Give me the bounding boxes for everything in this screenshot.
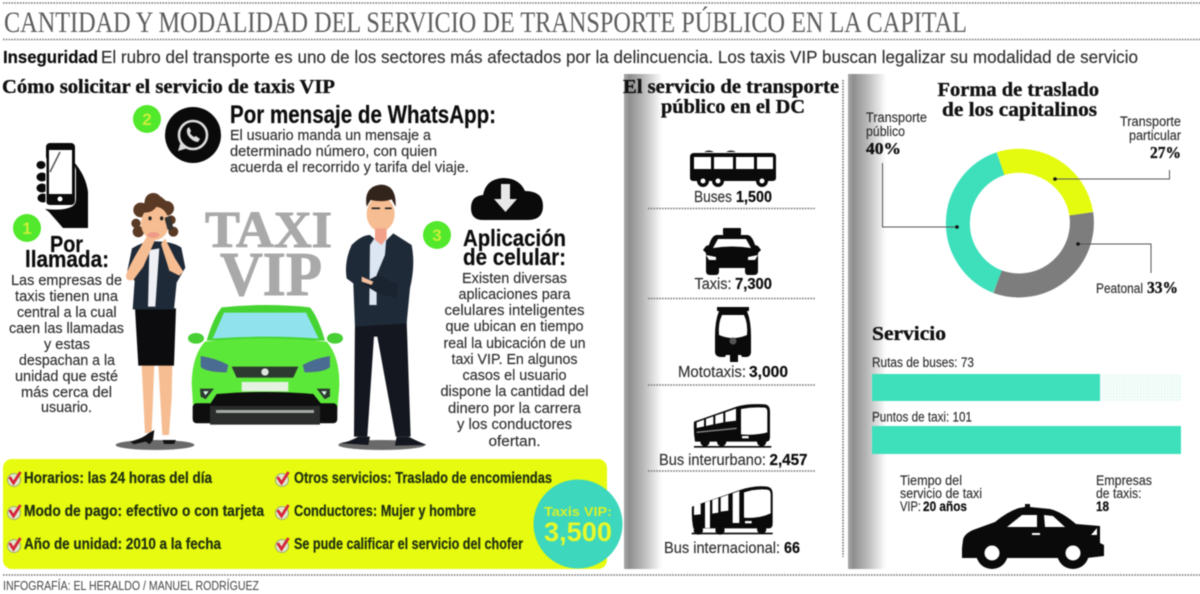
stat: taxi service time: Tiempo del	[900, 473, 962, 488]
bar chart: service	[872, 355, 1182, 454]
icon: number 1	[13, 214, 41, 242]
icon: cloud download	[471, 178, 543, 220]
icon: mototaxi	[715, 307, 751, 362]
title: CANTIDAD Y MODALIDAD DEL SERVICIO DE TRANSPORTE PÚBLICO EN LA CAPITAL	[4, 6, 967, 39]
app method text	[440, 225, 588, 450]
icon: number 3	[423, 221, 451, 249]
icon: bus	[690, 150, 776, 187]
checklist items: Año de unidad: 2010 a la fecha	[24, 536, 221, 553]
phone call method text: central a la cual	[17, 305, 116, 321]
label: pedestrian 33%: 33%	[1147, 278, 1178, 297]
TAXI VIP wordmark: TAXI	[205, 202, 332, 259]
illustration: woman on phone	[116, 193, 194, 450]
checklist items: Modo de pago: efectivo o con tarjeta	[24, 503, 264, 520]
donut chart	[958, 161, 1082, 285]
icon: hand holding phone	[36, 143, 88, 228]
phone call method text	[9, 231, 124, 416]
label: public transport 40%: 40%	[866, 139, 901, 158]
phone call method text: taxis tienen una	[15, 289, 119, 305]
label: mototaxis: Mototaxis:	[678, 364, 746, 381]
icon: number 2: 2	[142, 110, 152, 129]
WhatsApp method text: El usuario manda un mensaje a	[230, 127, 432, 144]
app method text: casos el usuario	[462, 368, 566, 384]
phone call method text: usuario.	[41, 400, 92, 416]
label: taxis	[694, 276, 772, 293]
check icons	[8, 472, 288, 552]
phone call method text: despachan a la	[19, 353, 116, 369]
panel: how residents travel	[848, 74, 1182, 569]
phone call method text: y estas	[44, 337, 90, 353]
label: private transport 27%	[1120, 114, 1181, 162]
app method text: dinero por la carrera	[448, 401, 582, 417]
stat: taxi service time	[900, 473, 982, 514]
icon: intercity bus	[694, 404, 771, 448]
illustration: green taxi	[188, 305, 343, 425]
TAXI VIP wordmark: VIP	[220, 241, 322, 309]
heading: how to request: Cómo solicitar el servicio de taxis VIP	[2, 76, 335, 98]
WhatsApp method text: determinado número, con quien	[230, 143, 437, 160]
leader lines	[882, 163, 1170, 273]
label: mototaxis: 3,000	[749, 364, 788, 381]
label: private transport 27%: 27%	[1150, 143, 1181, 162]
app method text: de celular:	[463, 244, 566, 270]
WhatsApp method text	[230, 101, 496, 176]
checklist items	[24, 470, 552, 553]
WhatsApp method text: acuerda el recorrido y tarifa del viaje.	[230, 159, 469, 176]
bar chart: service: Puntos de taxi: 101	[872, 410, 972, 424]
icon: international bus	[692, 486, 773, 535]
callout: VIP taxi count: Taxis VIP:	[544, 504, 612, 519]
panel: how to request VIP taxi	[2, 76, 622, 593]
intro text: Inseguridad	[3, 47, 98, 67]
label: private transport 27%: Transporte	[1120, 114, 1181, 129]
TAXI VIP wordmark	[205, 202, 332, 309]
app method text: Existen diversas	[462, 271, 567, 287]
heading: travel mode: de los capitalinos	[942, 99, 1097, 121]
heading: fleet	[623, 76, 839, 118]
app method text: Aplicación	[463, 225, 566, 251]
phone call method text: Por	[50, 231, 83, 257]
app method text: dispone la cantidad del	[440, 384, 588, 400]
callout: VIP taxi count: 3,500	[544, 517, 612, 547]
panel: features checklist	[3, 459, 622, 569]
label: pedestrian 33%	[1096, 278, 1178, 297]
label: taxis: 7,300	[735, 276, 772, 293]
label: intercity bus: 2,457	[770, 452, 808, 469]
label: taxis: Taxis:	[694, 276, 732, 293]
stat: taxi service time: 20 años	[923, 499, 967, 514]
icon: taxi front	[703, 228, 761, 275]
label: public transport 40%: público	[866, 124, 905, 139]
heading: fleet: público en el DC	[661, 96, 805, 118]
icon: taxi side	[962, 504, 1104, 569]
checklist items: Se pude calificar el servicio del chofer	[294, 536, 523, 553]
icon: number 2	[133, 105, 161, 133]
label: private transport 27%: particular	[1129, 128, 1181, 143]
stat: taxi companies: 18	[1096, 499, 1109, 514]
app method text: aplicaciones para	[458, 287, 571, 303]
label: public transport 40%: Transporte	[866, 110, 927, 125]
heading: service: Servicio	[872, 323, 946, 345]
stat: taxi companies	[1096, 473, 1152, 514]
label: mototaxis	[678, 364, 788, 381]
icon: number 1: 1	[22, 219, 32, 238]
label: international bus: 66	[784, 540, 800, 557]
app method text: ofertan.	[488, 434, 540, 450]
intro text: El rubro del transporte es uno de los sectores más afectados por la delincuencia. Los taxis VIP buscan legalizar su modalidad de servicio	[101, 47, 1138, 67]
illustration: man with crossed arms	[338, 185, 427, 450]
heading: fleet: El servicio de transporte	[623, 76, 839, 98]
app method text: que ubican en tiempo	[446, 319, 584, 335]
checklist items: Otros servicios: Traslado de encomiendas	[294, 470, 552, 487]
checklist items: Horarios: las 24 horas del día	[24, 470, 212, 487]
heading: travel mode: Forma de traslado	[938, 79, 1099, 101]
icon: WhatsApp	[165, 107, 221, 163]
phone call method text: Las empresas de	[11, 273, 122, 289]
app method text: celulares inteligentes	[444, 303, 584, 319]
icon: number 3: 3	[432, 226, 442, 245]
phone call method text: caen las llamadas	[9, 321, 124, 337]
label: buses: 1,500	[736, 189, 772, 206]
app method text: real la ubicación de un	[444, 336, 586, 352]
stat: taxi companies: Empresas	[1096, 473, 1152, 488]
app method text: taxi VIP. En algunos	[452, 352, 578, 368]
phone call method text: más cerca del	[21, 385, 112, 401]
label: buses	[694, 189, 772, 206]
app method text: y los conductores	[457, 417, 572, 433]
bar chart: service: Rutas de buses: 73	[872, 355, 974, 370]
stat: taxi service time: servicio de taxi	[900, 486, 982, 501]
label: public transport 40%	[866, 110, 927, 158]
WhatsApp method text: Por mensaje de WhatsApp:	[230, 101, 496, 129]
panel: public transport fleet	[623, 74, 843, 569]
callout: VIP taxi count	[534, 480, 622, 568]
phone call method text: llamada:	[25, 246, 109, 272]
label: international bus: Bus internacional:	[664, 540, 780, 557]
label: intercity bus: Bus interurbano:	[659, 452, 766, 469]
checklist items: Conductores: Mujer y hombre	[294, 503, 476, 520]
heading: travel mode	[938, 79, 1099, 121]
credit: INFOGRAFÍA: EL HERALDO / MANUEL RODRÍGUEZ	[3, 578, 259, 593]
stat: taxi companies: de taxis:	[1096, 486, 1142, 501]
stat: taxi service time: VIP:	[900, 499, 921, 514]
label: pedestrian 33%: Peatonal	[1096, 281, 1143, 296]
label: buses: Buses	[694, 189, 732, 206]
phone call method text: unidad que esté	[15, 369, 118, 385]
